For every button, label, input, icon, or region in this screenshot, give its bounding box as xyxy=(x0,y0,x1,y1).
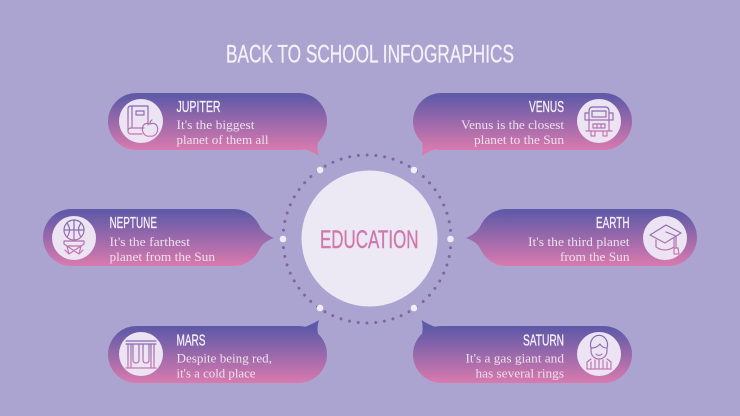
panel: Saturn xyxy=(413,320,632,383)
text block xyxy=(466,352,565,380)
heading: EARTH xyxy=(596,215,630,232)
icon: school bus xyxy=(577,99,621,143)
central diagram xyxy=(280,155,454,323)
heading: NEPTUNE xyxy=(110,215,157,232)
panel: Mars xyxy=(108,320,327,383)
text block xyxy=(461,118,565,147)
text block: has several rings xyxy=(476,366,564,380)
icon: school doors xyxy=(119,332,163,376)
heading: MARS xyxy=(176,332,206,350)
text block: It's the farthest xyxy=(110,235,191,249)
text block: planet to the Sun xyxy=(474,133,565,147)
ring nodes xyxy=(280,167,454,311)
text block: It's the biggest xyxy=(176,118,255,132)
text block xyxy=(176,118,269,147)
panel: Earth xyxy=(466,209,697,266)
icon: graduation cap xyxy=(643,216,687,260)
panel: Venus xyxy=(413,93,632,156)
text block xyxy=(528,235,630,264)
heading: SATURN xyxy=(523,332,564,350)
icon: basketball hoop xyxy=(52,216,96,260)
center circle xyxy=(302,170,438,306)
center label: EDUCATION xyxy=(320,226,418,254)
heading: VENUS xyxy=(529,99,564,116)
text block xyxy=(176,352,272,380)
panel: Neptune xyxy=(43,209,274,266)
panel: Jupiter xyxy=(108,93,327,156)
dotted ring xyxy=(283,155,451,323)
icon: book and apple xyxy=(119,99,163,143)
text block xyxy=(110,235,216,264)
text block: Despite being red, xyxy=(176,352,272,366)
text block: Venus is the closest xyxy=(461,118,565,132)
text block: it's a cold place xyxy=(176,366,256,380)
text block: It's the third planet xyxy=(528,235,630,249)
icon: student xyxy=(577,332,621,376)
text block: It's a gas giant and xyxy=(466,352,565,366)
heading: JUPITER xyxy=(176,99,220,116)
text block: from the Sun xyxy=(560,250,630,264)
title: BACK TO SCHOOL INFOGRAPHICS xyxy=(226,40,514,68)
text block: planet of them all xyxy=(176,133,269,147)
text block: planet from the Sun xyxy=(110,250,216,264)
